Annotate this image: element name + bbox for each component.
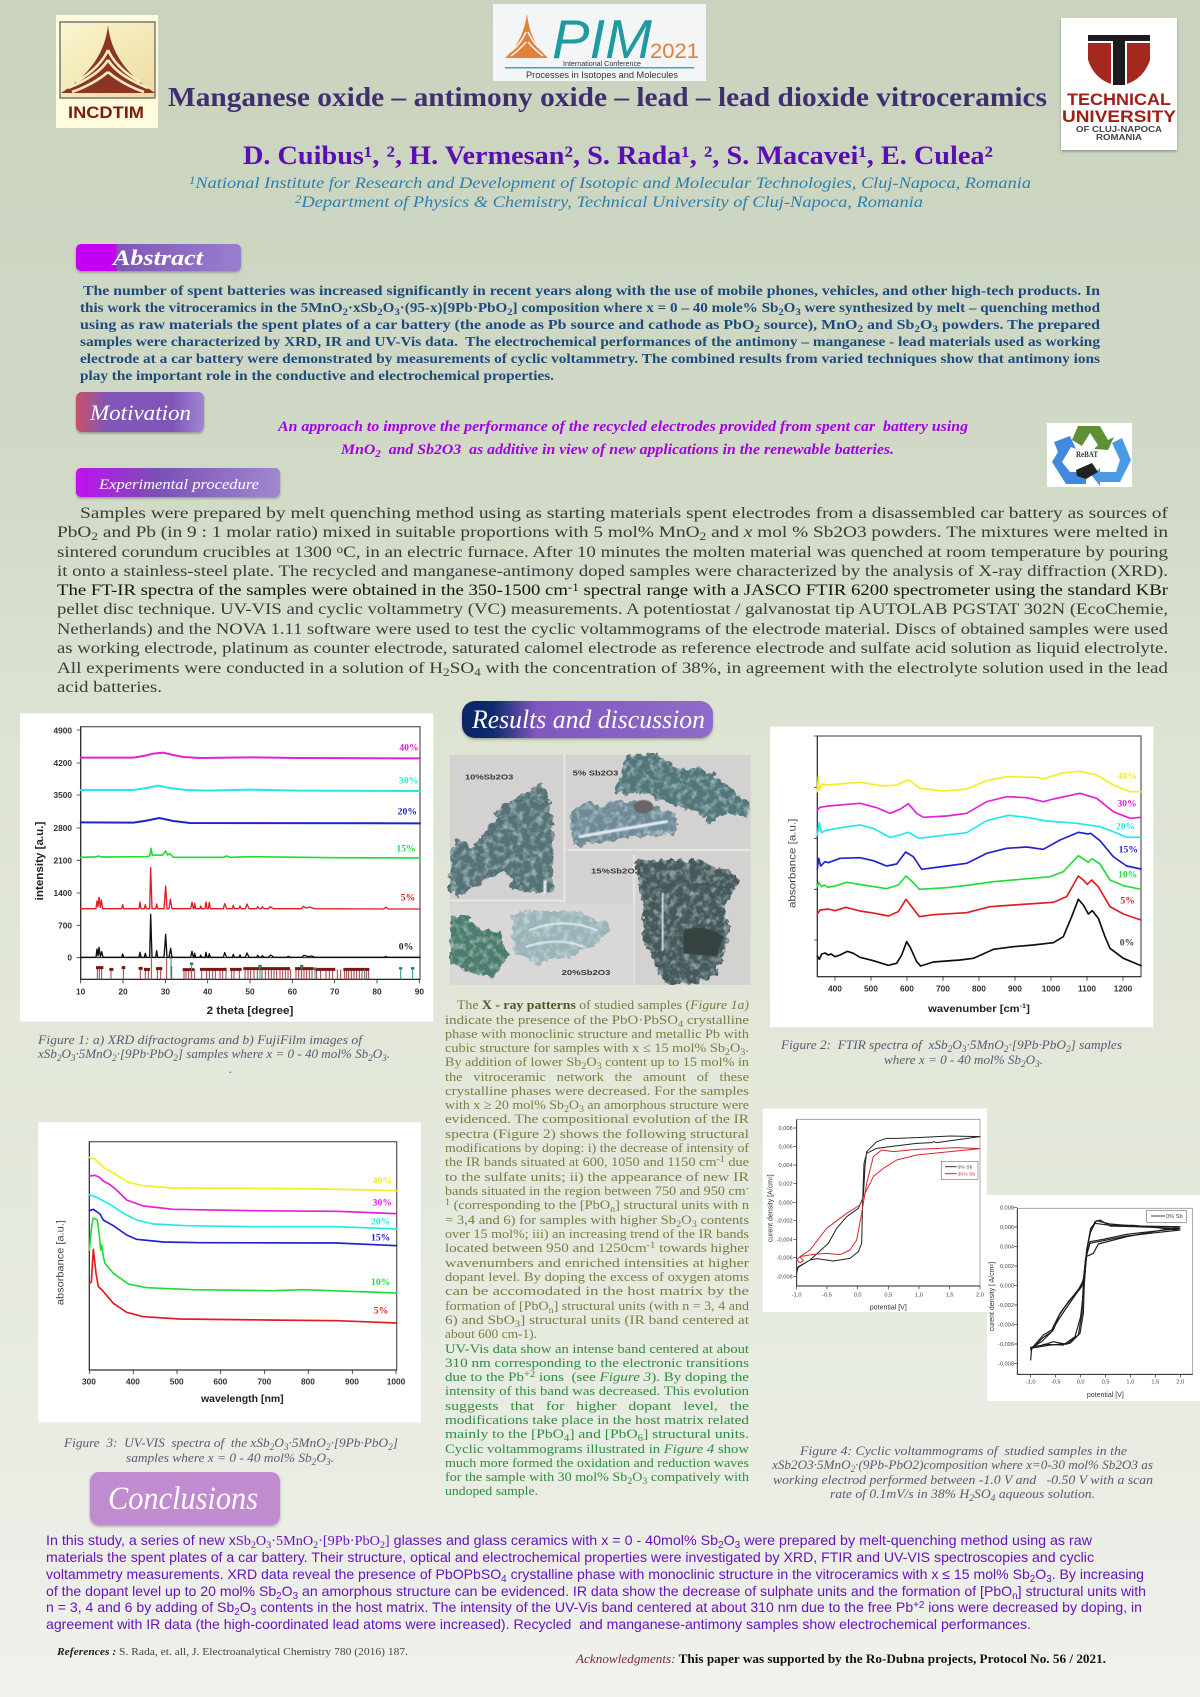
results and discussion text: with x ≥ 20 mol% Sb 2O3 an amorphous structure were xyxy=(445,1098,749,1114)
legend: 0% Sb xyxy=(958,1165,973,1171)
y axis tick labels: 0,000 xyxy=(1000,1284,1014,1290)
x axis tick labels: 0,5 xyxy=(884,1293,892,1299)
x axis tick labels: 10 xyxy=(76,987,86,997)
curve: 0 percent Sb xyxy=(797,1136,980,1273)
experimental procedure text: sintered corundum crucibles at 1300 oC, in an electric furnace. After 10 minutes the molten material was quenched at room temperature by pouring xyxy=(57,544,1168,561)
references: References : S. Rada, et. all, J. Electroanalytical Chemistry 780 (2016) 187. xyxy=(56,1646,408,1658)
results and discussion text: over 15 mol%; iii) an increasing trend of the IR bands xyxy=(445,1227,749,1241)
experimental procedure text: pellet disc technique. UV-VIS and cyclic voltammetry (VC) measurements. A potentiostat / galvanostat tip AUTOLAB PGSTAT 302N (EcoChemie, xyxy=(57,601,1168,618)
curve: 30 percent xyxy=(817,793,1141,818)
results and discussion text: the vitroceramic network the amount of these xyxy=(445,1070,749,1084)
heading: Abstract: Abstract xyxy=(111,245,204,270)
curve labels: 20% xyxy=(1116,821,1135,832)
results and discussion text: The X - ray patterns of studied samples ( Figure 1a) xyxy=(457,998,749,1012)
conclusions text: materials the spent plates of a car battery. Their structure, optical and electrochemical properties were investigated by XRD, FTIR and UV-VIS spectroscopies and cyclic xyxy=(46,1549,1094,1565)
curve labels: 10% xyxy=(371,1277,390,1288)
curve: 20 percent xyxy=(81,818,420,823)
curve: 15 percent xyxy=(89,1209,397,1246)
results and discussion text: 6) and SbO 3] structural units (IR band centered at xyxy=(445,1313,750,1329)
results and discussion text: crystalline phases were decreased. For the samples xyxy=(445,1084,749,1098)
y axis tick labels: 0,000 xyxy=(779,1200,793,1206)
results and discussion text: phase with monoclinic structure and metallic Pb with xyxy=(445,1027,750,1041)
caption: figure 2 xyxy=(780,1037,1122,1069)
results and discussion text: can be accomodated in the host matrix by the xyxy=(445,1284,749,1298)
conclusions text: voltammetry measurements. XRD data reveal the presence of PbOPbSO4 crystalline phase with monoclinic structure in the vitroceramics with x ≤ 15 mol% Sb 2O3. By increasing xyxy=(46,1566,1144,1585)
curve labels: 0% xyxy=(1120,937,1134,948)
x axis tick labels: 0,0 xyxy=(854,1293,862,1299)
title: Manganese oxide – antimony oxide – lead – lead dioxide vitroceramics xyxy=(168,82,1047,112)
x axis tick labels: 700 xyxy=(936,983,950,993)
y axis tick labels xyxy=(777,1126,793,1280)
y axis title: curent density [A/cm2] xyxy=(767,1174,775,1242)
caption: figure 1: . xyxy=(229,1061,232,1076)
x axis tick labels: 400 xyxy=(828,983,842,993)
abstract text: play the important role in the conductive and electrochemical properties. xyxy=(80,368,554,383)
abstract text: using as raw materials the spent plates of a car battery (the anode as Pb source and cathode as PbO 2 source), MnO 2 and Sb 2O3 powders. The prepared xyxy=(80,317,1101,335)
x axis tick labels: -1,0 xyxy=(1026,1380,1036,1386)
y axis tick labels: -0,006 xyxy=(998,1342,1014,1348)
curve labels: 15% xyxy=(1119,844,1138,855)
panel: figure 2 FTIR chart xyxy=(770,727,1153,1027)
y axis tick labels xyxy=(53,725,72,963)
x axis tick labels: 300 xyxy=(82,1376,96,1386)
experimental procedure text: The FT-IR spectra of the samples were obtained in the 350-1500 cm -1 spectral range with a JASCO FTIR 6200 spectrometer using the standard KBr xyxy=(57,582,1169,599)
caption: figure 4 xyxy=(771,1443,1153,1503)
reference peak markers xyxy=(96,957,414,979)
curves: 0 percent Sb cycles xyxy=(1031,1220,1180,1360)
y axis tick labels: 0,002 xyxy=(779,1182,793,1188)
y axis tick labels: 0,008 xyxy=(1000,1206,1014,1212)
acknowledgments: Acknowledgments: This paper was supported by the Ro-Dubna projects, Protocol No. 56 / 2021. xyxy=(575,1652,1106,1666)
experimental procedure text: as working electrode, platinum as counter electrode, saturated calomel electrode as reference electrode and sulfate acid solution as liquid electrolyte. xyxy=(57,640,1168,657)
x axis tick labels: 2,0 xyxy=(976,1293,984,1299)
photo: glass samples: 20%Sb2O3 xyxy=(562,968,610,977)
curve labels: 15% xyxy=(371,1232,390,1243)
sample: 5 percent upper xyxy=(613,755,750,823)
results and discussion text: suggests that for higher dopant level, the xyxy=(445,1399,749,1413)
y axis tick labels: 3500 xyxy=(53,790,72,800)
icon: ReBAT recycling xyxy=(1047,423,1132,487)
curve: 10 percent xyxy=(89,1218,397,1293)
results and discussion text: evidenced. The compositional evolution of the IR xyxy=(445,1112,750,1126)
photo: glass samples: 15%Sb2O3 xyxy=(591,866,640,875)
x axis tick labels: 60 xyxy=(288,987,297,997)
heading: Experimental procedure: Experimental procedure xyxy=(98,477,259,493)
y axis tick labels: -0,006 xyxy=(777,1256,793,1262)
logo: Technical University of Cluj-Napoca: UNIVERSITY xyxy=(1062,107,1177,126)
heading: Abstract xyxy=(76,244,241,271)
y axis tick labels: 0,004 xyxy=(779,1163,793,1169)
experimental procedure text: Netherlands) and the NOVA 1.11 software were used to test the cyclic voltammograms of the electrode material. Discs of obtained samples were used xyxy=(57,621,1168,638)
affiliations xyxy=(189,175,1031,211)
x axis tick labels xyxy=(76,987,424,997)
curve labels: 5% xyxy=(1120,896,1135,907)
heading: Conclusions xyxy=(90,1472,280,1525)
x axis tick labels: 20 xyxy=(118,987,128,997)
y axis tick labels: 0,006 xyxy=(1000,1225,1014,1231)
curve labels: 10% xyxy=(1118,870,1137,881)
conclusions text xyxy=(46,1532,1146,1632)
y axis tick labels: 2800 xyxy=(53,823,72,833)
photo: glass samples: 5% Sb2O3 xyxy=(573,768,618,777)
results and discussion text: cubic structure for samples with x ≤ 15 mol% Sb 2O3. xyxy=(445,1041,749,1057)
abstract text: electrode at a car battery were demonstrated by measurements of cyclic voltammetry. The combined results from varied techniques show that antimony ions xyxy=(80,351,1100,366)
caption: figure 1: Figure 1: a) XRD difractograms and b) FujiFilm images of xyxy=(37,1032,364,1047)
results and discussion text: Cyclic voltammograms illustrated in Figure 4 show xyxy=(445,1442,750,1456)
experimental procedure text: it onto a stainless-steel plate. The recycled and manganese-antimony doped samples were characterized by the analysis of X-ray diffraction (XRD). xyxy=(57,563,1168,580)
x axis tick labels: 700 xyxy=(257,1376,272,1386)
x axis tick labels: 500 xyxy=(864,983,878,993)
caption: figure 4: working electrod performed between -1.0 V and -0.50 V with a scan xyxy=(773,1472,1153,1487)
curve labels: 30% xyxy=(373,1197,392,1208)
panel: figure 4a cyclic voltammogram xyxy=(763,1109,987,1312)
results and discussion text: for the sample with 30 mol% Sb 2O3 compatively with xyxy=(445,1470,750,1486)
x axis tick labels: 0,5 xyxy=(1102,1380,1110,1386)
y axis tick labels: 1400 xyxy=(53,888,72,898)
curve labels xyxy=(396,742,419,952)
x axis tick labels: 1,5 xyxy=(1151,1380,1159,1386)
x axis tick labels: 1100 xyxy=(1078,983,1096,993)
results and discussion text xyxy=(445,998,750,1498)
heading: Results and discussion: Results and discussion xyxy=(471,705,705,734)
curve: 20 percent xyxy=(817,815,1141,838)
curve labels: 5% xyxy=(401,892,415,903)
curve: 40 percent xyxy=(89,1157,397,1191)
conclusions text: agreement with IR data (the high-coordinated lead atoms were increased). Recycled and manganese-antimony samples show electrochemical performances. xyxy=(46,1616,1031,1632)
caption: figure 2: where x = 0 - 40 mol% Sb2O3. xyxy=(884,1052,1043,1069)
curve: 5 percent xyxy=(89,1249,397,1323)
legend: 30% Sb xyxy=(958,1172,975,1178)
experimental procedure text: PbO 2 and Pb (in 9 : 1 molar ratio) mixed in suitable proportions with 5 mol% MnO 2 and x mol % Sb2O3 powders. The mixtures were melted in xyxy=(57,524,1168,543)
logo: Technical University of Cluj-Napoca: ROMANIA xyxy=(1096,133,1142,142)
experimental procedure text: All experiments were conducted in a solution of H 2SO 4 with the concentration of 38%, in agreement with the electrolyte solution used in the lead xyxy=(57,660,1168,679)
conclusions text: n = 3, 4 and 6 by adding of Sb2O3 contents in the host matrix. The intensity of the UV-Vis band centered at about 310 nm due to the free Pb +2 ions were decreased by doping, in xyxy=(46,1599,1142,1618)
results and discussion text: 1 (corresponding to the [PbO n] structural units with n xyxy=(445,1197,750,1214)
panel: figure 1 XRD chart xyxy=(20,713,433,1022)
sample: 20 percent left piece xyxy=(450,915,508,977)
results and discussion text: By addition of lower Sb 2O3 content up to 15 mol% in xyxy=(445,1055,750,1071)
y axis tick labels xyxy=(998,1206,1014,1367)
legend xyxy=(941,1161,978,1179)
legend xyxy=(1147,1210,1186,1222)
caption: figure 1 xyxy=(37,1032,390,1076)
y axis tick labels: -0,004 xyxy=(998,1322,1014,1328)
y axis tick labels: 0 xyxy=(67,953,72,963)
affiliations: 2Department of Physics & Chemistry, Technical University of Cluj-Napoca, Romania xyxy=(295,194,923,211)
x axis tick labels: 800 xyxy=(301,1376,315,1386)
caption: figure 2: Figure 2: FTIR spectra of xSb 2O3·5MnO2·[9Pb·PbO2] samples xyxy=(780,1037,1122,1054)
abstract text: The number of spent batteries was increased significantly in recent years along with the use of mobile phones, vehicles, and other high-tech products. In xyxy=(83,283,1101,298)
sample: 5 percent lower xyxy=(570,800,677,847)
results and discussion text: wavenumbers and enriched intensities at higher xyxy=(445,1256,750,1270)
motivation statement: MnO 2 and Sb2O3 as additive in view of new applications in the renewable batteries. xyxy=(340,442,894,460)
experimental procedure text: Samples were prepared by melt quenching method using as starting materials spent electrodes from a disassembled car battery as sources of xyxy=(80,505,1169,522)
curve labels: 20% xyxy=(398,806,417,817)
logo: INCDTIM: INCDTIM xyxy=(68,103,144,122)
x axis tick labels: 2,0 xyxy=(1176,1380,1184,1386)
x axis tick labels: 70 xyxy=(330,987,340,997)
caption: figure 3: Figure 3: UV-VIS spectra of the xSb 2O3·5MnO2·[9Pb·PbO2] xyxy=(63,1435,398,1452)
curve labels: 30% xyxy=(1117,798,1137,809)
curve: 10 percent xyxy=(817,856,1141,889)
abstract text: this work the vitroceramics in the 5MnO 2·xSb 2O3·(95-x)[9Pb·PbO 2] composition where x = 0 – 40 mole% Sb 2O3 were synthesized by melt – quenching method xyxy=(80,300,1101,318)
results and discussion text: = 3,4 and 6) for samples with higher Sb 2O3 contents xyxy=(445,1213,749,1229)
x axis tick labels: 800 xyxy=(972,983,986,993)
caption: figure 4: xSb2O3·5MnO2·(9Pb-PbO2)composition where x=0-30 mol% Sb2O3 as xyxy=(771,1457,1153,1474)
x axis title: potential [V] xyxy=(870,1305,907,1312)
results and discussion text: due to the Pb +2 ions (see Figure 3 ). By doping the xyxy=(445,1369,749,1384)
x axis tick labels: 500 xyxy=(170,1376,184,1386)
caption: figure 3 xyxy=(63,1435,398,1467)
curve labels xyxy=(371,1176,392,1317)
curve labels: 5% xyxy=(374,1306,388,1317)
x axis tick labels: 1,0 xyxy=(915,1293,923,1299)
results and discussion text: modifications by doping: i) the decrease of intensity of xyxy=(445,1141,750,1155)
x axis tick labels: 90 xyxy=(415,987,424,997)
heading: Motivation: Motivation xyxy=(89,400,191,425)
photo: glass samples: 10%Sb2O3 xyxy=(465,773,513,782)
x axis tick labels xyxy=(1026,1380,1184,1386)
logo: PIM 2021 conference: PIM xyxy=(552,8,652,70)
curve: 30 percent xyxy=(89,1175,397,1214)
y axis tick labels: -0,002 xyxy=(777,1219,793,1225)
x axis tick labels: 1,5 xyxy=(946,1293,954,1299)
x axis title: wavelength [nm] xyxy=(200,1394,284,1405)
logo: Technical University of Cluj-Napoca: TECHNICAL xyxy=(1067,90,1171,109)
x axis tick labels xyxy=(82,1376,406,1386)
y axis tick labels: -0,004 xyxy=(777,1237,793,1243)
results and discussion text: spectra (Figure 2) shows the following structural xyxy=(445,1127,750,1141)
x axis tick labels xyxy=(828,983,1133,993)
y axis tick labels: 700 xyxy=(58,920,72,930)
logo: Technical University of Cluj-Napoca xyxy=(1061,18,1177,150)
y axis title: intensity [a.u.] xyxy=(34,821,46,900)
abstract text xyxy=(80,283,1101,383)
x axis tick labels: 0,0 xyxy=(1077,1380,1085,1386)
sample: 20 percent xyxy=(512,910,613,965)
x axis tick labels: 900 xyxy=(345,1376,359,1386)
y axis title: absorbance [a.u.] xyxy=(787,818,798,908)
x axis title: wavenumber [cm -1] xyxy=(927,1003,1030,1015)
affiliations: 1National Institute for Research and Development of Isotopic and Molecular Technologies, Cluj-Napoca, Romania xyxy=(189,175,1031,192)
caption: figure 1: xSb2O3·5MnO2·[9Pb·PbO2] samples where x = 0 - 40 mol% Sb2O3. xyxy=(37,1046,390,1063)
y axis title: curent density [ A/cm2] xyxy=(989,1262,996,1331)
curve labels: 15% xyxy=(396,844,416,855)
x axis tick labels: 40 xyxy=(203,987,213,997)
caption: figure 3: samples where x = 0 - 40 mol% Sb 2O3. xyxy=(126,1450,334,1467)
y axis tick labels: 0,008 xyxy=(779,1126,793,1132)
panel: figure 3 UV-VIS chart xyxy=(38,1122,421,1422)
panel: figure 4b cyclic voltammogram xyxy=(987,1195,1200,1401)
x axis tick labels: 600 xyxy=(900,983,914,993)
curve: 15 percent xyxy=(817,832,1141,869)
curve labels: 0% xyxy=(399,941,413,952)
abstract text: samples were characterized by XRD, IR and UV-Vis data. The electrochemical performances of the antimony – manganese - lead materials used as working xyxy=(80,334,1100,349)
curve: 5 percent xyxy=(817,876,1141,920)
heading: Conclusions: Conclusions xyxy=(108,1481,258,1517)
x axis tick labels: 30 xyxy=(161,987,170,997)
authors: D. Cuibus¹, ², H. Vermesan², S. Rada¹, ², S. Macavei¹, E. Culea² xyxy=(243,141,993,170)
results and discussion text: located between 950 and 1250cm -1 towards higher xyxy=(445,1240,750,1255)
y axis tick labels: 2100 xyxy=(53,855,72,865)
curve: 40 percent xyxy=(81,753,420,758)
curve labels xyxy=(1116,771,1138,948)
results and discussion text: undoped sample. xyxy=(445,1484,538,1498)
curve labels: 30% xyxy=(399,775,418,786)
results and discussion text: about 600 cm-1). xyxy=(445,1327,537,1341)
x axis tick labels: 600 xyxy=(213,1376,228,1386)
conclusions text: In this study, a series of new xSb2O3·5MnO2·[9Pb·PbO2] glasses and glass ceramics with x = 0 - 40mol% Sb 2O3 were prepared by melt-quenching method using as raw xyxy=(46,1532,1093,1551)
y axis tick labels: -0,008 xyxy=(777,1274,793,1280)
y axis tick labels: 0,004 xyxy=(1000,1245,1014,1251)
y axis tick labels: 4200 xyxy=(53,758,72,768)
curve: 20 percent xyxy=(89,1195,397,1229)
results and discussion text: modifications take place in the host matrix related xyxy=(445,1413,750,1427)
motivation statement: An approach to improve the performance of the recycled electrodes provided from spent car battery using xyxy=(277,419,968,435)
curve: 15 percent xyxy=(81,848,420,858)
x axis tick labels: -0,5 xyxy=(822,1293,832,1299)
results and discussion text: bands situated in the region between 750 and 950 cm - xyxy=(445,1183,749,1198)
sample: 10 percent xyxy=(450,783,553,898)
x axis tick labels: 400 xyxy=(126,1376,140,1386)
curve labels: 40% xyxy=(373,1176,392,1187)
logo: PIM 2021 conference xyxy=(493,4,706,81)
results and discussion text: 310 nm corresponding to the electronic transitions xyxy=(445,1356,749,1370)
sample: 15 percent xyxy=(635,860,740,983)
conclusions text: of the dopant level up to 20 mol% Sb2O3 an amorphous structure can be evidenced. IR data show the decrease of sulphate units and the formation of [PbO n] structural units with xyxy=(46,1583,1146,1602)
curve labels: 20% xyxy=(371,1217,390,1228)
results and discussion text: much more formed the oxidation and reduction waves xyxy=(445,1456,749,1470)
heading: Motivation xyxy=(76,392,204,432)
y axis tick labels: -0,002 xyxy=(998,1303,1014,1309)
curve: 30 percent xyxy=(81,786,420,791)
photo: glass samples xyxy=(450,755,751,985)
x axis tick labels: -0,5 xyxy=(1051,1380,1061,1386)
caption: figure 4: Figure 4: Cyclic voltammograms of studied samples in the xyxy=(799,1443,1127,1458)
x axis tick labels: 1,0 xyxy=(1126,1380,1134,1386)
curve labels: 40% xyxy=(1118,771,1137,782)
icon: ReBAT recycling: ReBAT xyxy=(1076,450,1099,459)
results and discussion text: the IR bands situated at 600, 1050 and 1150 cm -1 due xyxy=(445,1154,749,1169)
results and discussion text: UV-Vis data show an intense band centered at about xyxy=(445,1342,749,1356)
results and discussion text: mainly to the [PbO 4] and [PbO 6] structural units. xyxy=(445,1427,749,1443)
x axis tick labels xyxy=(792,1293,984,1299)
y axis title: absorbance [a.u.] xyxy=(56,1220,67,1305)
logo: PIM 2021 conference: Processes in Isotopes and Molecules xyxy=(526,70,678,81)
y axis tick labels: 0,002 xyxy=(1000,1264,1014,1270)
y axis tick labels: -0,008 xyxy=(998,1361,1014,1367)
curve: 30 percent Sb xyxy=(797,1148,980,1263)
x axis tick labels: -1,0 xyxy=(792,1293,802,1299)
y axis tick labels: 0,006 xyxy=(779,1144,793,1150)
x axis tick labels: 80 xyxy=(372,987,382,997)
logo: PIM 2021 conference: 2021 xyxy=(650,40,699,63)
curve: 40 percent xyxy=(817,771,1141,792)
heading: Experimental procedure xyxy=(76,468,280,497)
results and discussion text: formation of [PbO n] structural units (with n = 3, 4 and xyxy=(445,1299,750,1315)
experimental procedure text xyxy=(57,505,1169,696)
caption: figure 4: rate of 0.1mV/s in 38% H 2SO4 aqueous solution. xyxy=(830,1486,1095,1503)
logo: PIM 2021 conference: International Conference xyxy=(563,61,641,68)
curve: 5 percent xyxy=(81,868,420,909)
results and discussion text: intensity of this band was decreased. This evolution xyxy=(445,1384,750,1398)
results and discussion text: indicate the presence of the PbO·PbSO 4 crystalline xyxy=(445,1013,749,1029)
results and discussion text: dopant level. By doping the excess of oxygen atoms xyxy=(445,1270,749,1284)
x axis title: 2 theta [degree] xyxy=(207,1005,294,1017)
x axis tick labels: 1200 xyxy=(1114,983,1133,993)
experimental procedure text: acid batteries. xyxy=(57,679,162,696)
x axis tick labels: 900 xyxy=(1008,983,1022,993)
x axis tick labels: 1000 xyxy=(1042,983,1061,993)
results and discussion text: to the sulfate units; ii) the appearance of new IR xyxy=(445,1170,750,1184)
x axis title: potential [V] xyxy=(1087,1392,1124,1399)
x axis tick labels: 50 xyxy=(245,987,255,997)
legend: 0% Sb xyxy=(1166,1214,1183,1220)
logo: Technical University of Cluj-Napoca: OF CLUJ-NAPOCA xyxy=(1076,125,1162,134)
curve: 0 percent xyxy=(81,914,420,957)
x axis tick labels: 1000 xyxy=(387,1376,406,1386)
curve: 0 percent xyxy=(817,899,1141,966)
logo: INCDTIM xyxy=(56,15,158,128)
y axis tick labels: 4900 xyxy=(53,725,72,735)
motivation statement xyxy=(277,419,968,460)
curve labels: 40% xyxy=(399,742,419,753)
